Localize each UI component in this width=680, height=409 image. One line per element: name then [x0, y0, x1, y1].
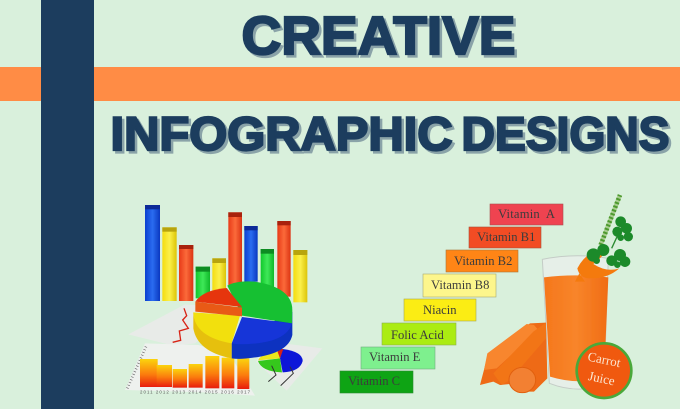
step: vitamin b8: Vitamin B8 [431, 278, 489, 292]
navy vertical bar [41, 0, 94, 409]
paper: small pie chart [256, 342, 322, 391]
title: creative: CREATIVE [242, 6, 516, 66]
step: niacin [404, 299, 476, 321]
title: infographic designs [110, 107, 672, 162]
vitamin staircase [340, 204, 563, 393]
step: vitamin b1: Vitamin B1 [477, 230, 535, 244]
title: infographic designs: DESIGNS [464, 110, 672, 162]
chart illustration [125, 205, 322, 396]
step: vitamin a: Vitamin A [498, 207, 555, 221]
title: creative: CREATIVE [244, 8, 518, 68]
step: vitamin e [361, 347, 435, 369]
step: vitamin c: Vitamin C [348, 374, 400, 388]
step: vitamin b8 [423, 274, 496, 297]
title: infographic designs: INFOGRAPHIC [113, 110, 455, 162]
straw and garnish [575, 195, 633, 282]
3d bars [145, 205, 307, 302]
step: vitamin c [340, 371, 413, 393]
carrot juice illustration [480, 195, 633, 398]
badge: carrot juice: Carrot [586, 349, 622, 370]
orange horizontal band [0, 67, 680, 101]
step: vitamin b2: Vitamin B2 [454, 254, 512, 268]
3d pie chart [193, 281, 292, 359]
title: infographic designs: INFOGRAPHIC [110, 107, 452, 160]
paper: bar chart [125, 343, 255, 396]
step: vitamin b1 [469, 227, 541, 248]
carrot pieces [480, 323, 547, 393]
paper: bar chart: 2011 2012 2013 2014 2015 2016 2017 [140, 389, 251, 394]
title: infographic designs: DESIGNS [462, 107, 670, 160]
glass of juice [542, 256, 608, 389]
step: vitamin e: Vitamin E [369, 350, 421, 364]
step: vitamin a [490, 204, 563, 225]
badge: carrot juice: Juice [587, 368, 616, 388]
badge: carrot juice [577, 343, 631, 398]
step: niacin: Niacin [423, 303, 457, 317]
paper: line chart [128, 304, 235, 346]
step: folic acid [382, 323, 456, 345]
step: folic acid: Folic Acid [391, 328, 445, 342]
step: vitamin b2 [446, 250, 518, 272]
